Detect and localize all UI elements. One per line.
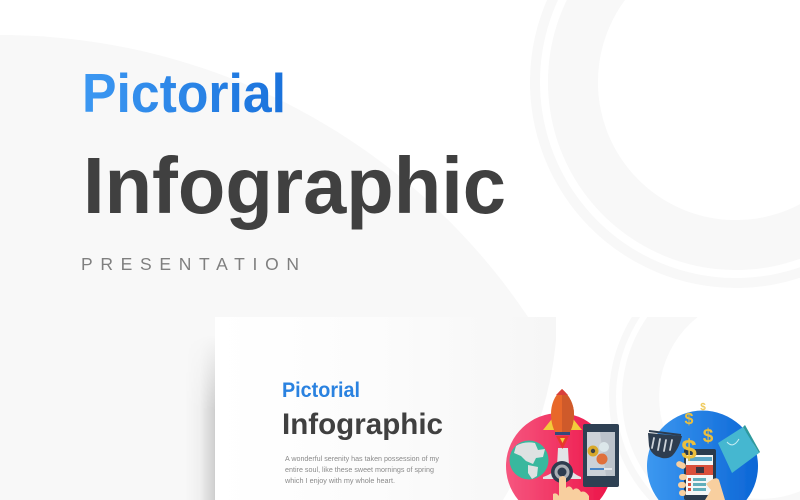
subtitle: presentation: PRESENTATION	[81, 254, 299, 274]
preview background shape	[215, 317, 556, 500]
rocket fins	[543, 415, 582, 430]
background circle	[0, 35, 612, 500]
tablet	[583, 424, 619, 487]
tablet screen	[587, 432, 615, 476]
preview body text	[284, 454, 439, 485]
preview heading: Pictorial: Pictorial	[282, 379, 360, 402]
preview rings	[609, 317, 800, 500]
card shadow	[200, 350, 215, 500]
slide preview panel	[215, 317, 800, 500]
preview body text: A wonderful serenity has taken possession of my	[285, 454, 439, 463]
blue disc	[647, 411, 758, 500]
infographic slide	[82, 72, 760, 500]
rocket nozzle	[555, 432, 570, 435]
pointing hand	[553, 476, 589, 500]
red disc	[506, 413, 612, 500]
smartphone screen	[686, 455, 713, 495]
dollar signs: $	[700, 402, 706, 413]
dollar signs: $	[703, 426, 714, 447]
icon: rocket launch app	[506, 389, 619, 500]
preview body text: which I enjoy with my whole heart.	[284, 476, 395, 485]
background rings top right	[530, 0, 800, 288]
title: Pictorial: Pictorial	[82, 62, 286, 124]
globe	[510, 440, 548, 480]
holding hand	[675, 460, 725, 500]
rocket smoke trail and base	[543, 448, 581, 479]
dollar signs: $	[685, 411, 694, 428]
dollar signs: $	[681, 434, 697, 465]
preview body text: entire soul, like these sweet mornings of spring	[285, 465, 434, 474]
preview heading: Infographic: Infographic	[282, 408, 443, 441]
shopping bag	[718, 425, 760, 473]
rocket flame	[556, 436, 569, 449]
dollar signs	[681, 402, 714, 465]
smartphone	[684, 449, 716, 500]
rocket body	[551, 389, 574, 432]
touch button	[551, 461, 573, 483]
icon: mobile shopping	[647, 402, 760, 500]
shopping basket	[648, 431, 682, 458]
title: Infographic: Infographic	[83, 141, 506, 230]
